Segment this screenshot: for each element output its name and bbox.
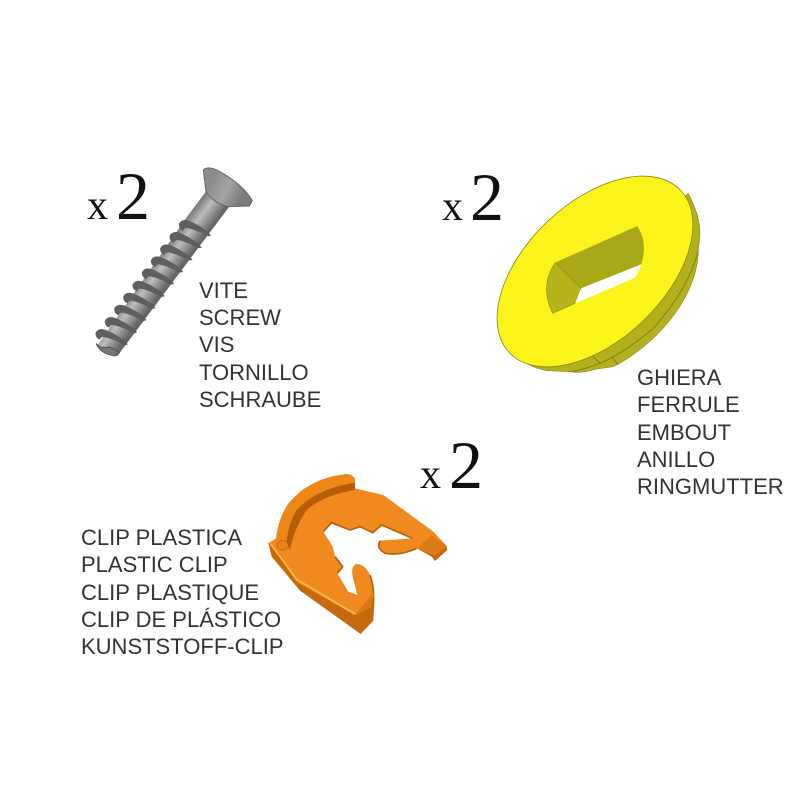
- screw head: [203, 168, 252, 207]
- clip slot wall shading: [323, 523, 417, 607]
- screw quantity: x 2: x: [87, 183, 108, 229]
- ferrule rim and collar: [512, 193, 700, 372]
- clip quantity: x 2: 2: [449, 427, 483, 503]
- ferrule quantity: x 2: x: [442, 184, 463, 230]
- screw label: VITE: [199, 278, 248, 303]
- clip quantity: x 2: x: [420, 452, 441, 498]
- clip quantity: x 2: [420, 427, 483, 503]
- clip raised rib: [276, 474, 355, 542]
- ferrule label: ANILLO: [637, 447, 715, 472]
- ferrule label: [637, 365, 784, 499]
- ferrule rim line: [570, 250, 698, 372]
- ferrule label: FERRULE: [637, 392, 740, 417]
- ferrule quantity: x 2: 2: [470, 159, 504, 235]
- ferrule face: [462, 140, 728, 403]
- screw label: SCREW: [199, 305, 281, 330]
- slot back wall: [555, 226, 644, 288]
- slot side wall: [547, 263, 581, 313]
- clip label: CLIP PLASTIQUE: [81, 580, 259, 605]
- clip label: PLASTIC CLIP: [81, 552, 228, 577]
- screw label: [199, 278, 321, 412]
- screw tip: [96, 343, 119, 356]
- screw shaft: [97, 215, 212, 356]
- screw neck: [188, 192, 229, 230]
- clip label: CLIP PLASTICA: [81, 525, 242, 550]
- clip end facets: [355, 535, 447, 615]
- clip peg: [277, 541, 288, 550]
- clip front edge highlight: [270, 543, 355, 614]
- screw label: SCHRAUBE: [199, 387, 321, 412]
- ferrule label: EMBOUT: [637, 420, 731, 445]
- screw label: TORNILLO: [199, 360, 309, 385]
- ferrule collar: [512, 193, 700, 372]
- clip rib shadow: [286, 483, 355, 551]
- icon: yellow ferrule: [462, 140, 728, 403]
- screw quantity: x 2: 2: [116, 158, 150, 234]
- ferrule slot: [547, 226, 644, 313]
- icon: orange plastic clip: [268, 474, 447, 634]
- screw label: VIS: [199, 332, 234, 357]
- slot opening: [575, 264, 641, 303]
- screw quantity: x 2: [87, 158, 150, 234]
- clip top face: [269, 474, 447, 615]
- clip side wall: [268, 543, 447, 634]
- icon: screw: [96, 168, 252, 356]
- ferrule quantity: x 2: [442, 159, 504, 235]
- clip label: [81, 525, 284, 659]
- ferrule collar facets: [592, 355, 618, 365]
- ferrule label: RINGMUTTER: [637, 474, 784, 499]
- clip label: KUNSTSTOFF-CLIP: [81, 634, 284, 659]
- screw threads: [96, 220, 211, 345]
- ferrule label: GHIERA: [637, 365, 722, 390]
- clip label: CLIP DE PLÁSTICO: [81, 607, 281, 632]
